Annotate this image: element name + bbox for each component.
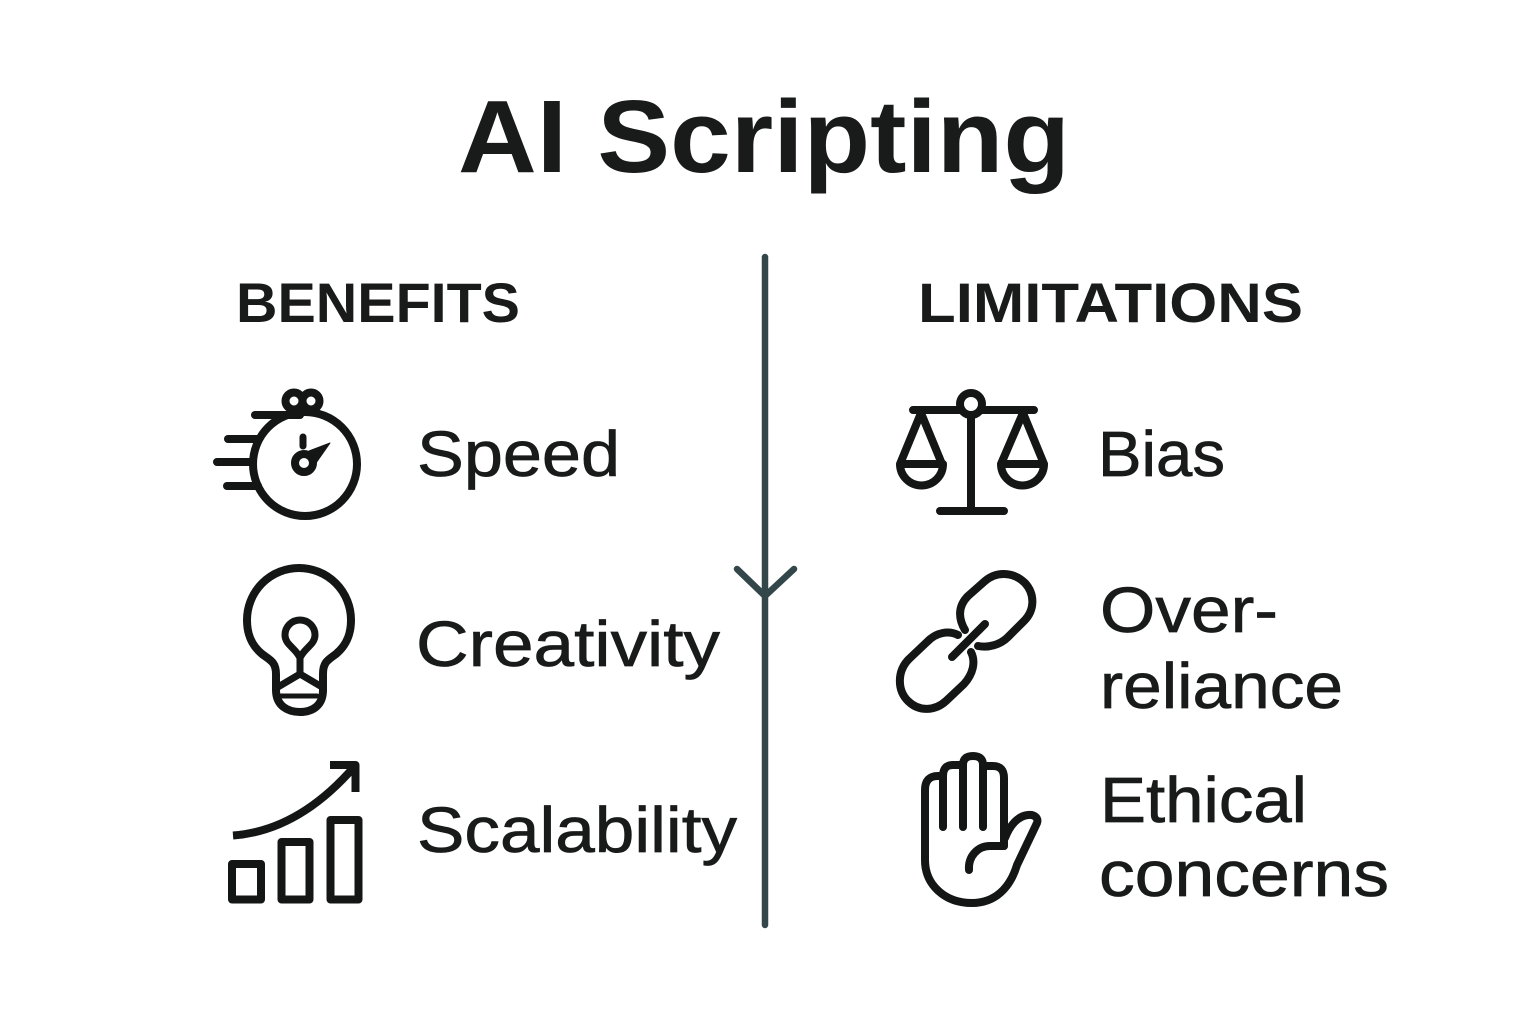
label: over-reliance: Over- <box>1100 574 1278 646</box>
label: ethical concerns: Ethical <box>1100 764 1307 836</box>
label: scalability: Scalability <box>417 794 737 866</box>
label: over-reliance <box>1100 574 1343 722</box>
heading: limitations: LIMITATIONS <box>918 271 1303 334</box>
label: bias: Bias <box>1098 418 1225 490</box>
label: ethical concerns: concerns <box>1099 838 1389 910</box>
heading: benefits: BENEFITS <box>236 271 520 334</box>
title: AI Scripting <box>458 79 1070 194</box>
label: ethical concerns <box>1099 764 1389 910</box>
icon: stopwatch <box>217 392 357 516</box>
icon: balance scale <box>900 393 1044 511</box>
panel: benefits <box>217 271 737 900</box>
label: speed: Speed <box>417 418 620 490</box>
label: creativity: Creativity <box>416 608 720 680</box>
icon: raised hand <box>925 756 1037 903</box>
label: over-reliance: reliance <box>1100 650 1343 722</box>
center divider with arrow <box>737 257 794 925</box>
icon: chain link <box>900 574 1032 709</box>
panel: limitations <box>900 271 1389 910</box>
icon: growth chart <box>232 765 358 900</box>
icon: light bulb <box>247 568 351 712</box>
